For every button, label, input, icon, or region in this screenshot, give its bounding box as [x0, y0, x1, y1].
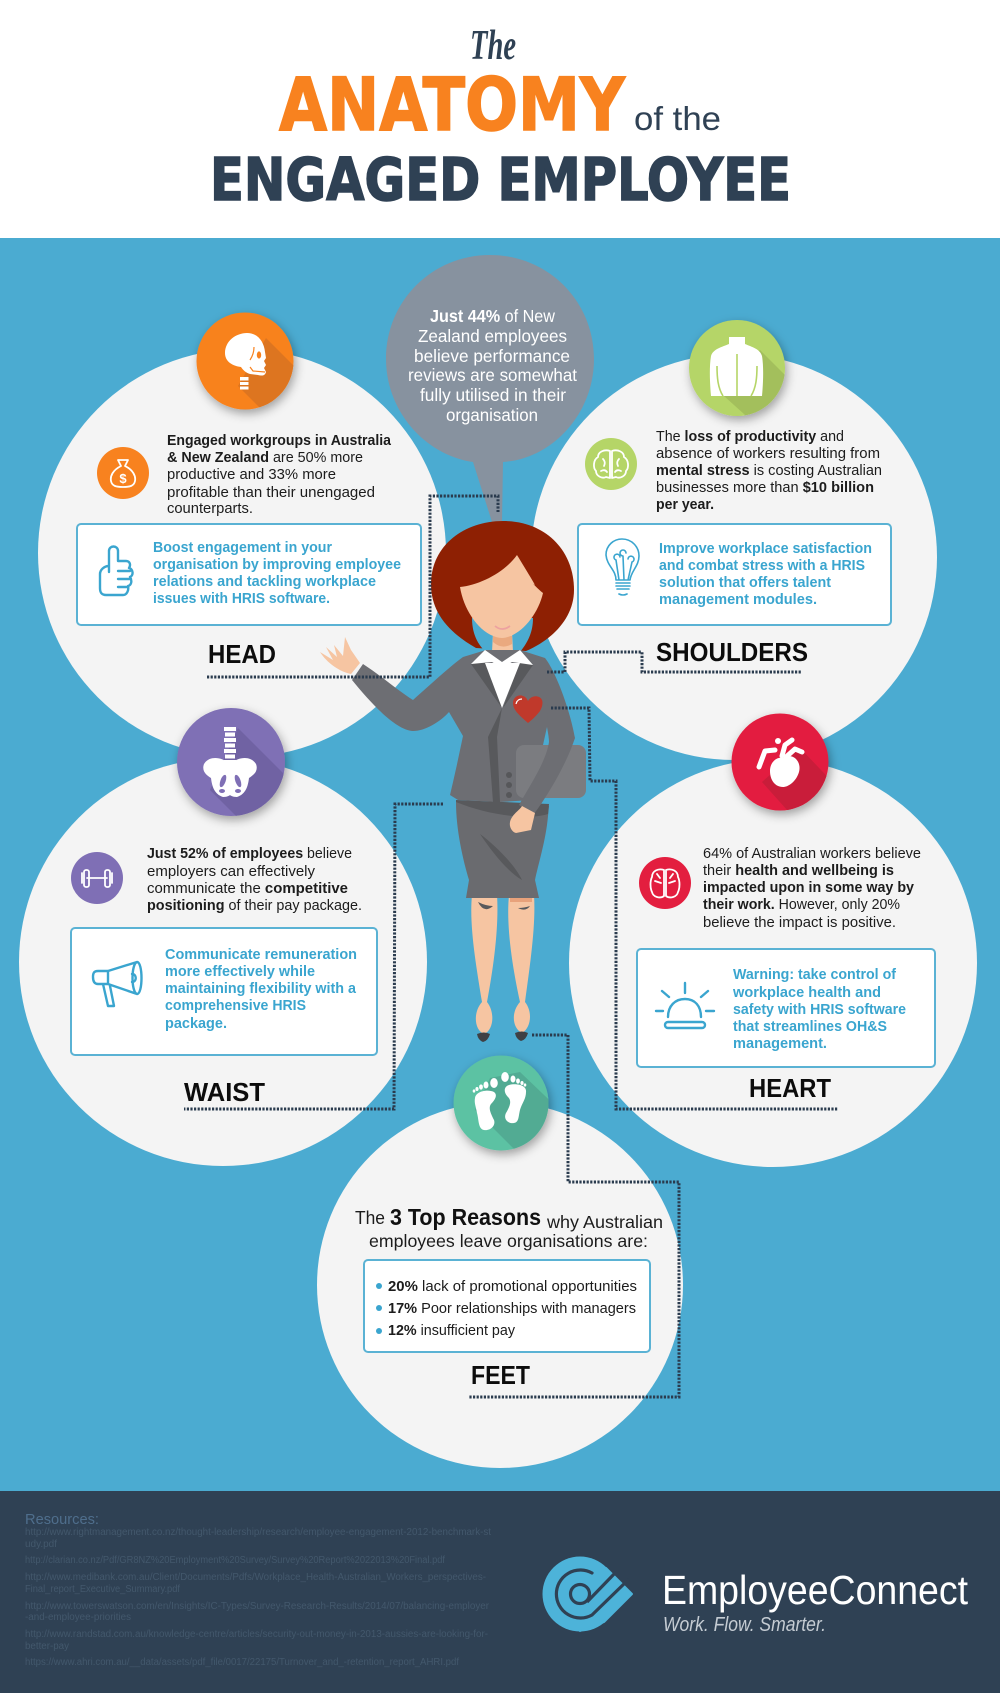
skirt — [456, 802, 549, 898]
waving hand — [320, 637, 360, 674]
text: waist statistic: employers can effectively — [147, 864, 316, 880]
callout: head: relations and tackling workplace — [153, 574, 376, 590]
text: feet heading: 3 Top Reasons — [390, 1204, 541, 1230]
speech bubble: Just 44% of New — [430, 306, 555, 326]
callout: feet reasons list: 20% lack of promotional opportunities — [388, 1279, 637, 1295]
speech bubble — [386, 255, 594, 522]
callout: feet reasons list — [364, 1260, 650, 1352]
text: feet heading: The — [355, 1208, 385, 1228]
title — [210, 23, 791, 214]
icon: shoulders torso — [689, 320, 800, 432]
heading: feet: FEET — [471, 1360, 530, 1390]
text: waist statistic: Just 52% of employees believe — [147, 846, 352, 862]
callout: heart: workplace health and — [732, 985, 881, 1001]
title word: The: The — [470, 23, 516, 69]
hair — [431, 521, 574, 651]
jacket — [352, 650, 556, 802]
resources list: http://www.rightmanagement.co.nz/thought-leadership/research/employee-engagement-2012-benchmark-st — [25, 1527, 491, 1538]
icon: pelvis and spine — [177, 708, 300, 830]
left leg and foot — [471, 895, 497, 1034]
text: head statistic — [167, 433, 392, 517]
callout: shoulders: Improve workplace satisfaction — [659, 541, 872, 557]
panel: feet — [317, 1056, 683, 1468]
panel: head — [38, 312, 446, 757]
icon: footprints — [454, 1056, 565, 1155]
callout: heart — [637, 949, 935, 1067]
heading: waist: WAIST — [184, 1077, 265, 1107]
icon: skull — [192, 311, 302, 420]
lapels — [471, 662, 533, 708]
text: waist statistic: communicate the competitive — [147, 881, 348, 897]
footer — [0, 1491, 1000, 1693]
icon: megaphone — [93, 962, 142, 1006]
blue background panel — [0, 238, 1000, 1491]
text: heart statistic: impacted upon in some way by — [703, 880, 914, 896]
icon: light bulb — [606, 539, 639, 595]
connector: head — [207, 496, 498, 677]
resources list: http://www.medibank.com.au/Client/Documents/Pdfs/Workplace_Health-Australian_Workers_perspectives- — [25, 1572, 486, 1583]
text: feet heading — [355, 1204, 663, 1251]
callout: shoulders: management modules. — [659, 592, 817, 608]
text: shoulders statistic: mental stress is costing Australian — [656, 463, 882, 479]
logo mark — [542, 1556, 632, 1632]
text: head statistic: & New Zealand are 50% more — [167, 450, 363, 466]
title words: Engaged Employee: ENGAGED EMPLOYEE — [210, 145, 791, 214]
resources list: Resources: — [25, 1511, 99, 1528]
connector: heart — [551, 708, 838, 1109]
speech bubble: Zealand employees — [418, 326, 567, 346]
resources list: udy.pdf — [25, 1539, 57, 1550]
woman figure — [320, 521, 586, 1042]
text: shoulders statistic: businesses more than $10 billion — [656, 480, 874, 496]
resources list: Final_report_Executive_Summary.pdf — [25, 1584, 180, 1595]
callout: shoulders: solution that offers talent — [659, 575, 831, 591]
heading: heart: HEART — [749, 1073, 831, 1103]
callout: waist: package. — [165, 1016, 227, 1032]
resources list — [25, 1511, 491, 1668]
speech bubble: reviews are somewhat — [408, 365, 577, 385]
jacket buttons — [506, 772, 512, 778]
heading: head: HEAD — [208, 639, 276, 669]
icon: money bag — [97, 447, 149, 499]
panel: heart — [569, 714, 977, 1167]
resources list: http://www.randstad.com.au/knowledge-centre/articles/security-out-money-in-2013-aussies-are-looking-for- — [25, 1629, 488, 1640]
callout: waist: maintaining flexibility with a — [165, 981, 357, 997]
shirt and collar — [485, 663, 520, 708]
text: shoulders statistic: per year. — [656, 497, 714, 513]
connector: waist — [184, 804, 443, 1109]
icon: brain red — [639, 857, 691, 909]
text: shoulders statistic — [656, 429, 882, 513]
shoes — [477, 1032, 528, 1042]
lapel heart — [513, 695, 542, 723]
text: heart statistic: believe the impact is positive. — [703, 915, 896, 931]
logo wordmark: EmployeeConnect — [662, 1567, 969, 1613]
icon: thumbs up — [100, 546, 133, 595]
callout: heart: management. — [733, 1036, 827, 1052]
face — [460, 555, 543, 638]
icon: anatomical heart — [732, 714, 840, 820]
connector: feet — [469, 1035, 679, 1397]
icon: dumbbell — [71, 852, 123, 904]
text: shoulders statistic: absence of workers resulting from — [656, 446, 880, 462]
resources list: https://www.ahri.com.au/__data/assets/pdf_file/0017/22175/Turnover_and_-retention_report_AHRI.pdf — [25, 1657, 459, 1668]
text: heart statistic: their work. However, only 20% — [703, 897, 900, 913]
right leg and foot — [508, 895, 534, 1033]
resources list: http://clarian.co.nz/Pdf/GR8NZ%20Employment%20Survey/Survey%20Report%2022013%20Final.pdf — [25, 1555, 445, 1566]
text: feet heading: why Australian — [546, 1212, 663, 1232]
speech bubble: believe performance — [414, 346, 570, 366]
callout: heart: Warning: take control of — [733, 967, 896, 983]
text: feet heading: employees leave organisations are: — [369, 1231, 648, 1251]
callout: head: organisation by improving employee — [153, 557, 401, 573]
callout: feet reasons list: 12% insufficient pay — [388, 1323, 516, 1339]
heading: shoulders: SHOULDERS — [656, 637, 808, 667]
folder — [516, 745, 586, 798]
text: head statistic: productive and 33% more — [167, 467, 336, 483]
title word: Anatomy: ANATOMY — [279, 63, 626, 148]
text: shoulders statistic: The loss of productivity and — [656, 429, 844, 445]
callout: waist: more effectively while — [165, 964, 315, 980]
text: waist statistic: positioning of their pay package. — [147, 898, 362, 914]
text: head statistic: profitable than their unengaged — [167, 485, 375, 501]
callout: head: Boost engagement in your — [153, 540, 332, 556]
callout: heart: safety with HRIS software — [733, 1002, 906, 1018]
callout: waist: comprehensive HRIS — [165, 998, 306, 1014]
icon: money bag: $ — [119, 471, 127, 486]
text: head statistic: counterparts. — [167, 501, 253, 517]
callout: waist: Communicate remuneration — [165, 947, 357, 963]
neck — [492, 632, 513, 662]
callout: shoulders: and combat stress with a HRIS — [659, 558, 865, 574]
text: heart statistic: their health and wellbeing is — [703, 863, 894, 879]
speech bubble: organisation — [446, 405, 538, 425]
speech bubble: fully utilised in their — [420, 385, 566, 405]
text: waist statistic — [147, 846, 362, 914]
resources list: -and-employee-priorities — [25, 1612, 131, 1623]
tagline: Work. Flow. Smarter. — [663, 1614, 826, 1636]
resources list: better-pay — [25, 1641, 69, 1652]
icon: brain — [585, 438, 637, 490]
panel: shoulders — [531, 320, 937, 760]
right arm — [519, 658, 575, 814]
callout: heart: that streamlines OH&S — [733, 1019, 887, 1035]
resources list: http://www.towerswatson.com/en/Insights/IC-Types/Survey-Research-Results/2014/07/balancing-employer — [25, 1601, 490, 1612]
callout: shoulders — [578, 524, 891, 625]
callout: head — [77, 524, 421, 625]
text: head statistic: Engaged workgroups in Australia — [167, 433, 392, 449]
callout: head: issues with HRIS software. — [153, 591, 330, 607]
blue gap by the arm — [543, 727, 550, 745]
text: heart statistic: 64% of Australian workers believe — [703, 846, 921, 862]
title words: of the: of the — [634, 100, 721, 137]
text: heart statistic — [703, 846, 921, 931]
callout: waist — [71, 928, 377, 1055]
panel: waist — [19, 708, 427, 1166]
fist — [510, 806, 535, 833]
connector: shoulders — [547, 652, 802, 672]
icon: warning alarm — [656, 983, 714, 1028]
callout: feet reasons list: 17% Poor relationships with managers — [388, 1301, 636, 1317]
